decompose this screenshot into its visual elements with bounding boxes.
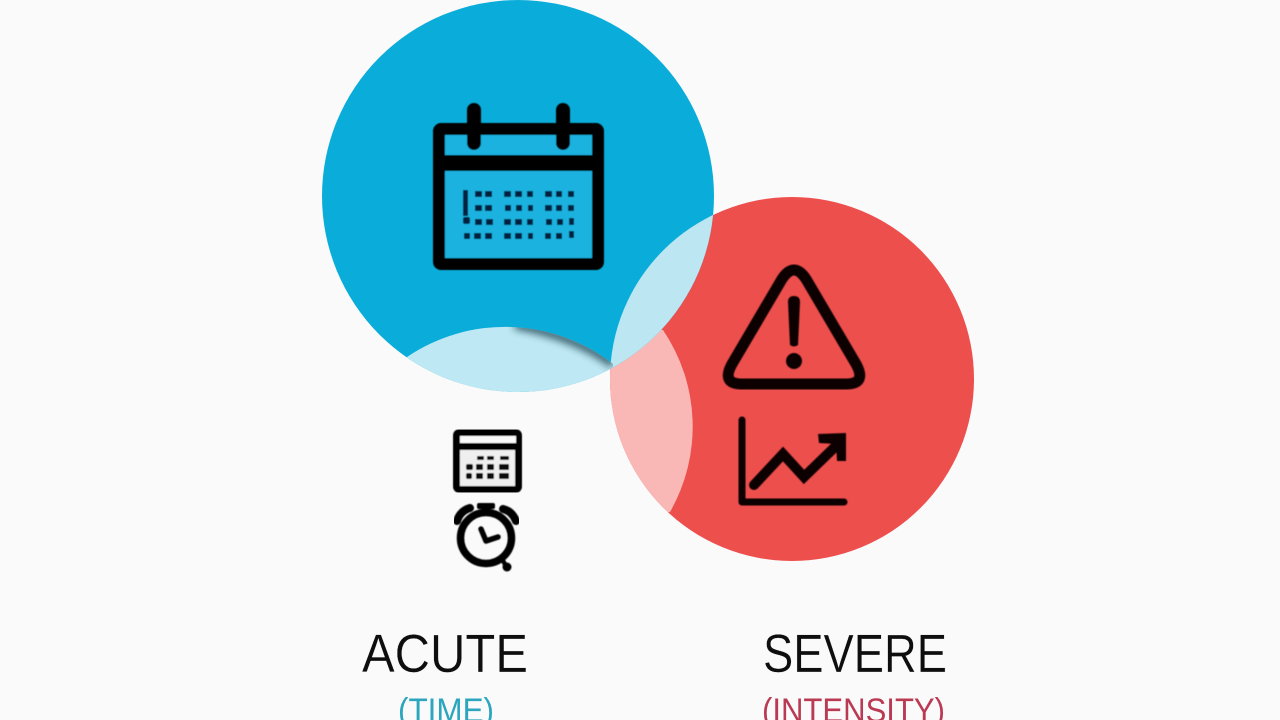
label: acute: ACUTE [362,624,528,684]
icon: rising line chart [742,420,846,502]
icon: large calendar [433,103,604,264]
panel: acute circle [322,0,714,392]
icon: small calendar [456,432,519,490]
label: severe: SEVERE [763,624,947,684]
overlap region: pink lens [610,330,693,512]
overlap region: pale blue lens between circles [610,215,714,369]
icon: alarm clock [457,503,516,572]
overlap region: pale blue lens at circle bottom [407,326,613,392]
icon: warning triangle [728,270,860,384]
panel: severe circle [590,197,974,561]
